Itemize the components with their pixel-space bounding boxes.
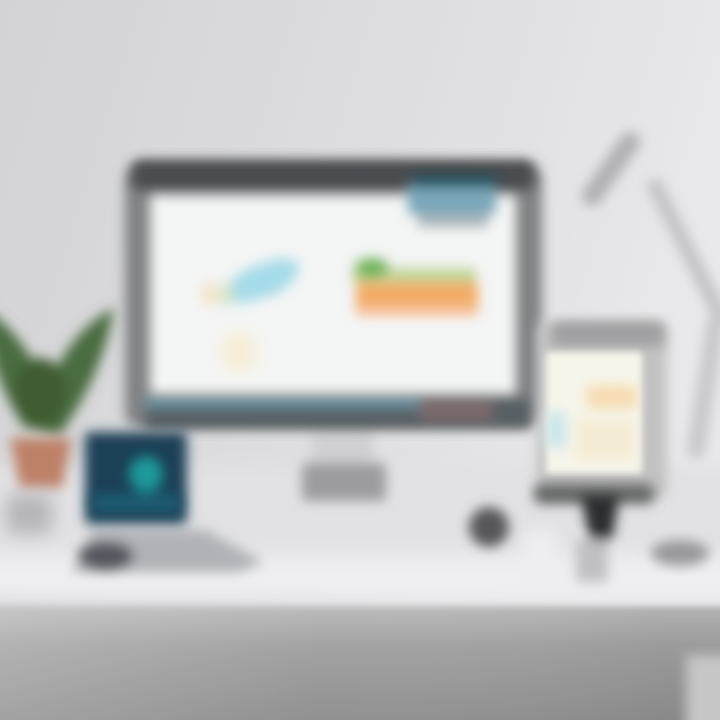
small cylinder xyxy=(523,530,557,590)
desk lamp xyxy=(592,142,720,450)
desk accessory xyxy=(651,540,709,566)
mouse xyxy=(469,507,509,547)
plant leaves xyxy=(0,308,114,435)
laptop base and shadow xyxy=(72,530,264,572)
monitor top bar xyxy=(132,160,534,190)
monitor frame xyxy=(125,165,542,427)
dashboard header tab xyxy=(408,176,496,227)
orange and green bar chart xyxy=(352,258,478,316)
monitor screen xyxy=(150,195,516,394)
small laptop xyxy=(72,432,264,572)
laptop screen xyxy=(85,432,187,524)
monitor xyxy=(125,160,542,428)
laptop screen glow xyxy=(92,456,180,512)
plant glass base xyxy=(6,494,52,534)
tablet top bezel xyxy=(552,322,664,346)
tablet frame xyxy=(537,322,667,498)
blue area chart xyxy=(202,258,300,306)
small pale chart xyxy=(221,332,257,372)
monitor bottom bar xyxy=(145,396,530,428)
desk surface xyxy=(0,465,720,600)
tablet screen xyxy=(546,352,642,474)
desk leg xyxy=(686,655,720,720)
tablet xyxy=(534,322,667,582)
tablet charts xyxy=(546,386,637,460)
monitor stand xyxy=(302,425,386,501)
plant xyxy=(0,308,114,534)
tablet stand xyxy=(534,484,654,582)
plant pot xyxy=(10,438,72,488)
desk front xyxy=(0,606,720,720)
